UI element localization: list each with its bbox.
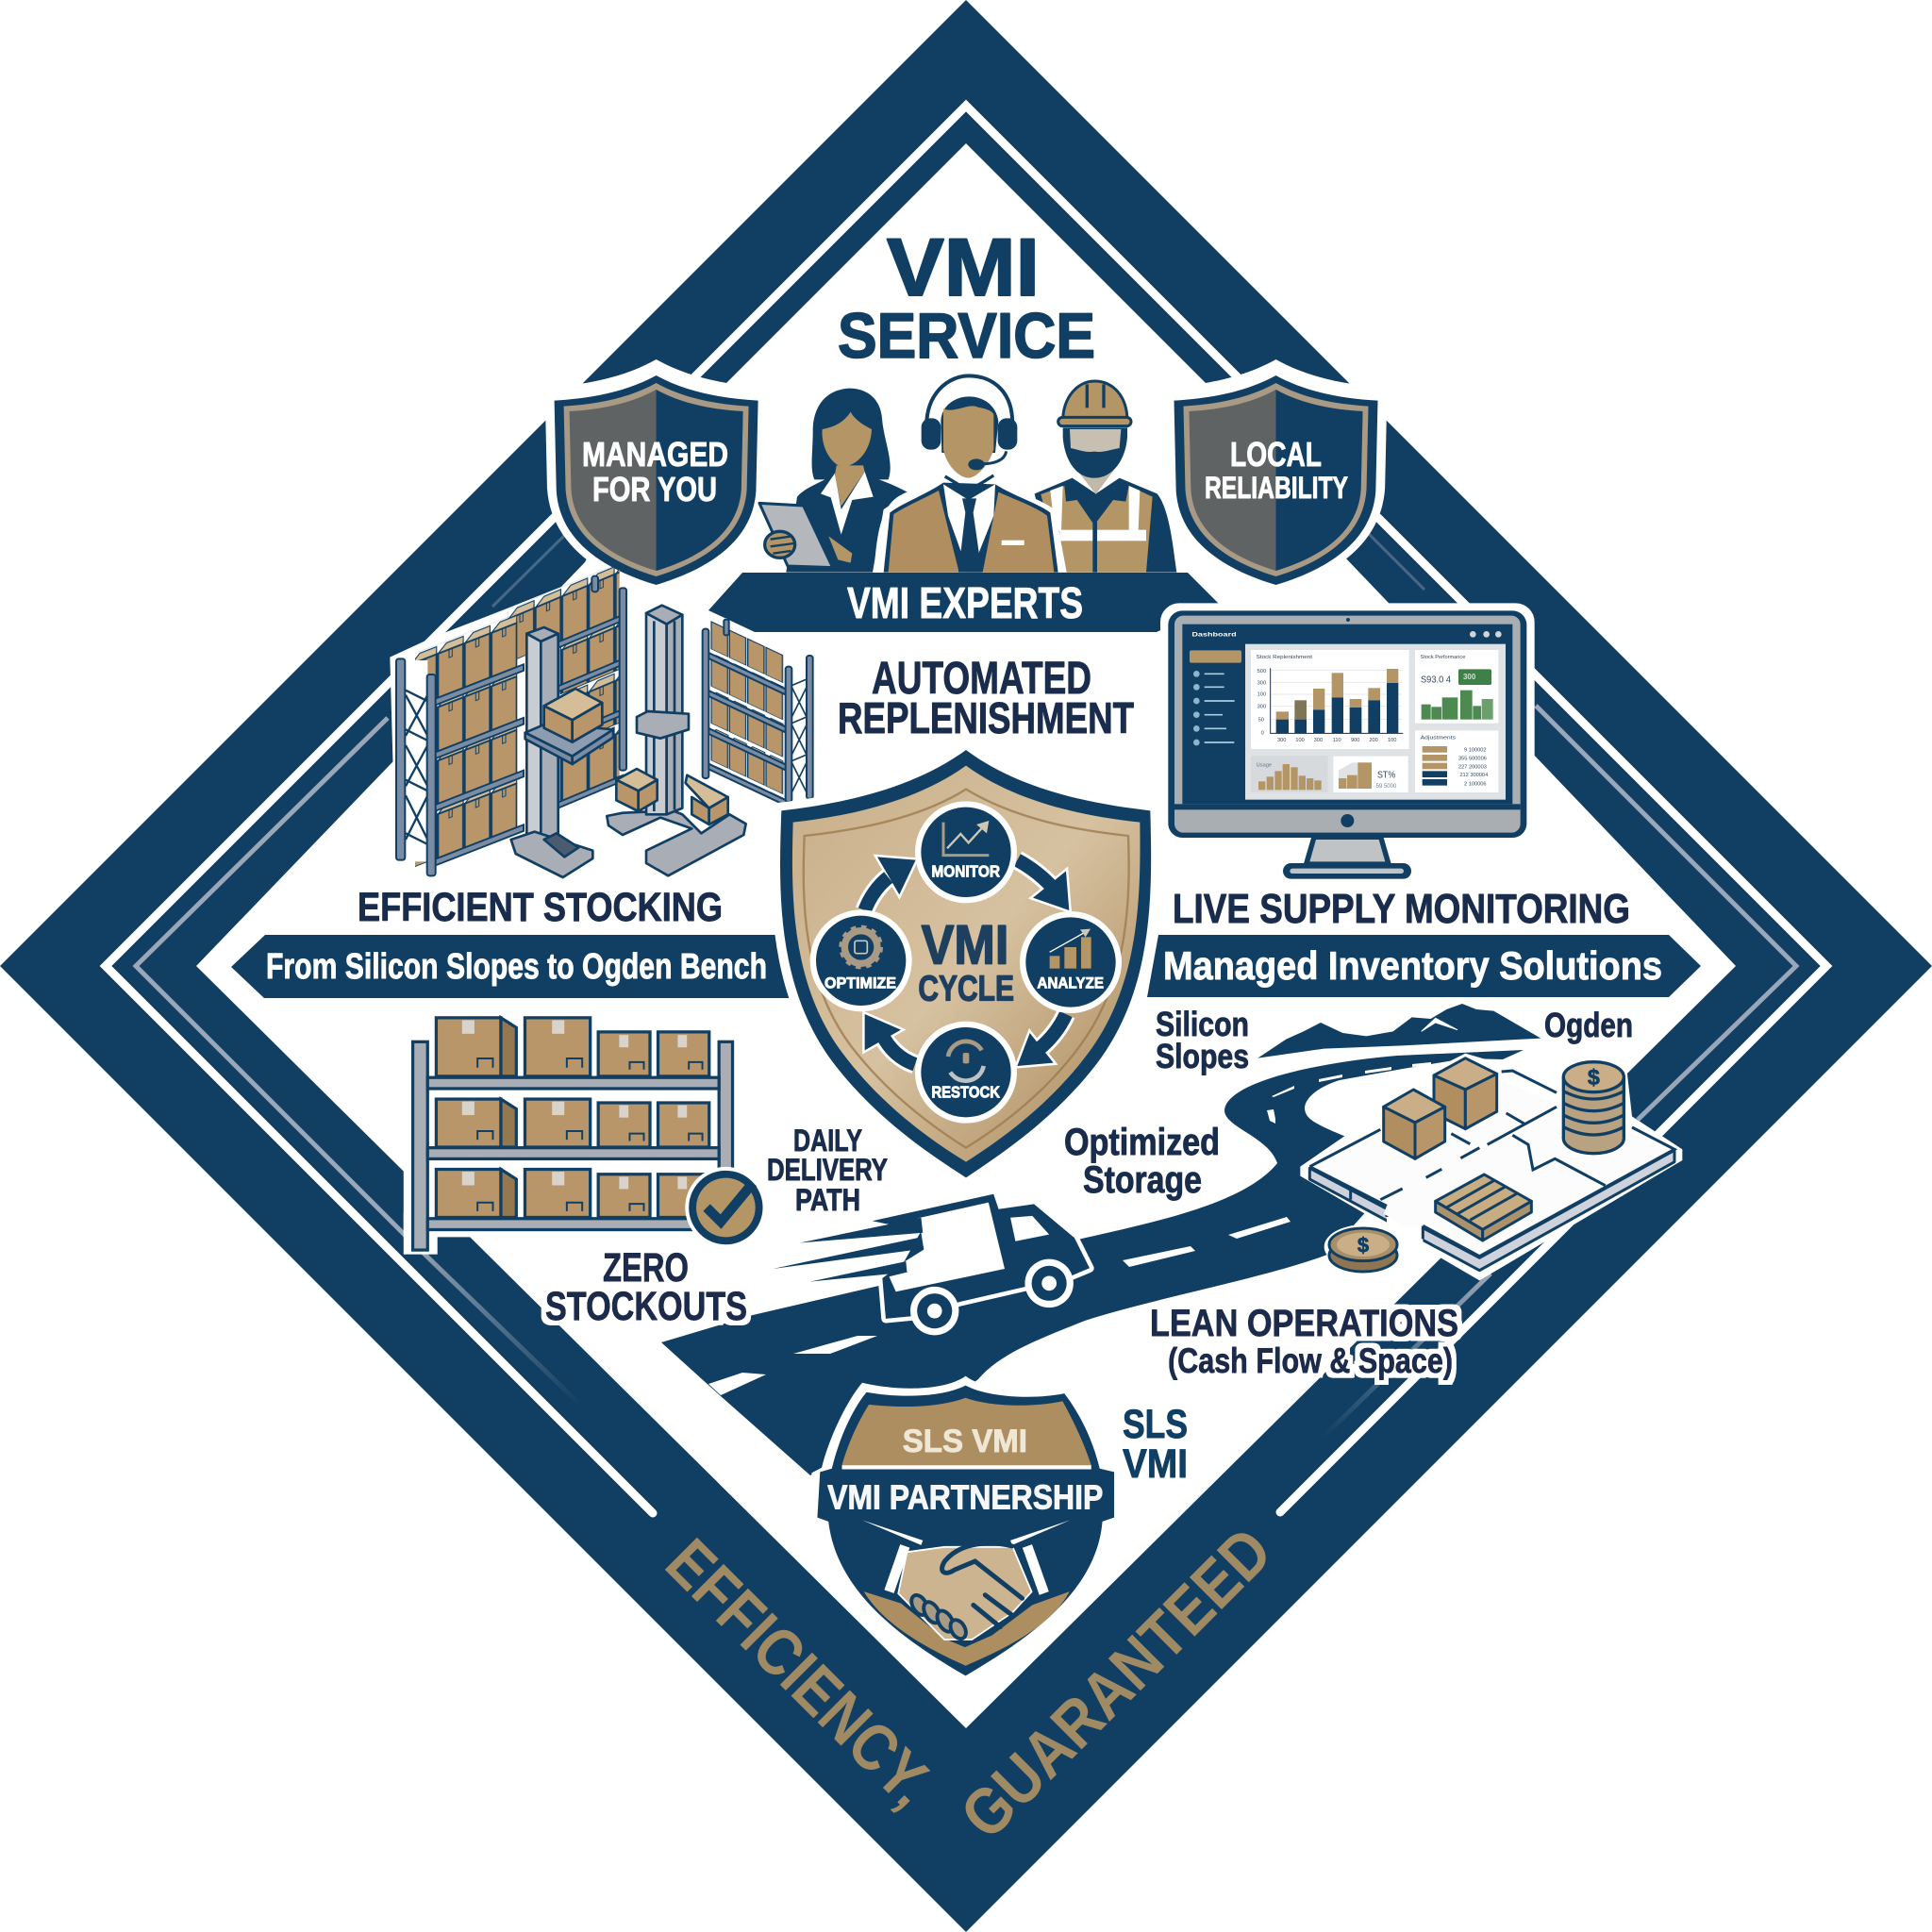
panel: green chart: 300	[1463, 673, 1476, 681]
shield: local reliability: LOCAL	[1230, 435, 1322, 474]
badge: VMI partnership: SLS VMI	[903, 1424, 1027, 1459]
shelf frame	[413, 1041, 733, 1250]
step: monitor: MONITOR	[931, 861, 1000, 880]
bar chart: main: 0	[1261, 730, 1264, 736]
label: SLS VMI	[1123, 1402, 1188, 1487]
label: daily delivery path: DELIVERY	[767, 1153, 888, 1187]
heading: live supply monitoring: LIVE SUPPLY MONITORING	[1173, 886, 1630, 932]
label: daily delivery path: DAILY	[793, 1124, 862, 1158]
panel: green chart	[1415, 650, 1498, 724]
rack: rear section	[508, 561, 623, 829]
boxes	[436, 1018, 709, 1217]
label: VMI cycle: CYCLE	[918, 969, 1014, 1008]
panel: small stat chart	[1333, 757, 1408, 792]
panel: small stat chart: 59 5000	[1376, 784, 1397, 790]
person: woman with tablet	[759, 389, 908, 573]
icon: pallet	[1436, 1174, 1531, 1241]
bar chart: main	[1251, 650, 1409, 749]
label: optimized storage: Storage	[1083, 1159, 1202, 1201]
label: SLS VMI: SLS	[1123, 1402, 1188, 1447]
bar chart: main: 500	[1257, 669, 1266, 675]
icon: check badge	[685, 1167, 766, 1248]
icon: coin: $	[1357, 1233, 1369, 1257]
icon: coin stack	[1563, 1062, 1624, 1154]
shelf: zero stockouts illustration	[404, 1012, 766, 1255]
bar chart: main: 100	[1295, 738, 1305, 743]
banner: from Silicon Slopes to Ogden Bench: From Silicon Slopes to Ogden Bench	[266, 947, 767, 987]
label: zero stockouts: ZERO	[603, 1245, 689, 1291]
panel: data table: Adjustments	[1421, 736, 1456, 741]
arrow: monitor to analyze	[1017, 860, 1069, 910]
step: restock: RESTOCK	[931, 1082, 1000, 1101]
label: Silicon Slopes: Slopes	[1156, 1037, 1249, 1075]
label: VMI cycle	[918, 915, 1014, 1008]
shield: local reliability: RELIABILITY	[1205, 471, 1348, 505]
rack: right section	[710, 621, 784, 804]
heading: efficient stocking: EFFICIENT STOCKING	[358, 885, 723, 930]
step: restock	[915, 1022, 1017, 1124]
monitor: live dashboard: Dashboard	[1191, 632, 1237, 639]
label: Silicon Slopes: Silicon	[1156, 1005, 1249, 1043]
central shield: VMI cycle	[771, 739, 1160, 1191]
panel: small tan histogram: Usage	[1257, 763, 1272, 769]
label: optimized storage	[1064, 1122, 1220, 1201]
label: zero stockouts: STOCKOUTS	[545, 1284, 747, 1329]
shield: managed for you	[545, 359, 768, 593]
banner: managed inventory solutions	[1147, 935, 1701, 997]
person: man with headset	[873, 375, 1067, 573]
icon: delivery truck	[773, 1194, 1090, 1335]
label: lean operations: (Cash Flow & Space)	[1168, 1341, 1453, 1380]
banner: from Silicon Slopes to Ogden Bench	[231, 935, 791, 998]
step: analyze	[1020, 911, 1122, 1013]
label: optimized storage: Optimized	[1064, 1122, 1220, 1163]
panel: data table: 9 100002	[1464, 748, 1487, 754]
arrow: optimize to monitor	[865, 857, 916, 910]
shield: managed for you: MANAGED	[582, 435, 728, 474]
bar chart: main: Stock Replenishment	[1257, 655, 1312, 660]
person: worker with helmet	[1035, 381, 1176, 573]
bar chart: main: 900	[1351, 738, 1359, 743]
label: lean operations: LEAN OPERATIONS	[1150, 1303, 1458, 1344]
bar chart: main: 200	[1369, 738, 1378, 743]
arrow: restock to optimize	[865, 1014, 915, 1064]
heading: automated replenishment	[838, 654, 1134, 742]
badge: VMI partnership	[811, 1376, 1120, 1681]
bar chart: main: 300	[1257, 704, 1266, 709]
title: SERVICE	[838, 300, 1095, 372]
bar chart: main: 100	[1257, 692, 1266, 698]
banner: VMI experts: VMI EXPERTS	[847, 578, 1083, 627]
label: daily delivery path: PATH	[795, 1183, 860, 1217]
panel: data table: 355 500006	[1458, 757, 1487, 762]
heading: automated replenishment: REPLENISHMENT	[838, 693, 1134, 742]
banner: managed inventory solutions: Managed Inventory Solutions	[1163, 943, 1662, 988]
step: optimize	[810, 909, 912, 1011]
label: VMI cycle: VMI	[922, 915, 1008, 976]
panel: data table: 2 100006	[1464, 781, 1487, 787]
icon: coin	[1324, 1224, 1402, 1272]
mountains	[1257, 1004, 1541, 1058]
illustration: warehouse racks and lifts	[390, 561, 814, 880]
label: zero stockouts	[545, 1245, 747, 1329]
icon: boxes on platform	[1384, 1058, 1497, 1158]
label: SLS VMI: VMI	[1123, 1441, 1188, 1487]
bar chart: main: 110	[1333, 738, 1341, 743]
panel: small tan histogram	[1251, 756, 1328, 792]
panel: green chart: Stock Performance	[1421, 655, 1465, 660]
tagline: guaranteed: GUARANTEED	[946, 1513, 1286, 1853]
shield: managed for you: FOR YOU	[592, 470, 717, 508]
shield: local reliability	[1164, 359, 1387, 593]
icon: handshake	[862, 1520, 1070, 1666]
panel: small stat chart: ST%	[1377, 771, 1395, 781]
lift: right column	[607, 606, 746, 875]
title: VMI	[887, 223, 1040, 313]
panel: data table: 212 300004	[1459, 773, 1488, 778]
banner: VMI experts	[708, 573, 1219, 632]
bar chart: main: 300	[1277, 738, 1286, 743]
icon: coin stack: $	[1588, 1065, 1600, 1090]
label: lean operations	[1150, 1303, 1458, 1380]
sidebar menu	[1190, 650, 1241, 745]
step: analyze: ANALYZE	[1037, 974, 1104, 992]
monitor: live dashboard	[1160, 603, 1535, 884]
label: Ogden: Ogden	[1544, 1006, 1633, 1044]
icon: VMI experts group	[759, 375, 1176, 573]
heading: automated replenishment: AUTOMATED	[872, 654, 1091, 704]
bar chart: main: 300	[1257, 680, 1266, 686]
road lane markings	[708, 1062, 1431, 1395]
arrow: analyze to restock	[1017, 1014, 1066, 1066]
rack: front section	[415, 611, 524, 874]
step: optimize: OPTIMIZE	[824, 974, 896, 992]
step: monitor	[915, 801, 1017, 903]
bar chart: main: 50	[1258, 718, 1264, 724]
label: Silicon Slopes	[1156, 1005, 1249, 1075]
panel: data table: 227 200003	[1458, 764, 1487, 770]
label: daily delivery path	[767, 1124, 888, 1217]
title	[838, 223, 1095, 372]
isometric site platform	[1300, 1054, 1682, 1280]
panel: data table	[1415, 730, 1498, 792]
panel: green chart: S93.0 4	[1421, 675, 1451, 685]
bar chart: main: 100	[1388, 738, 1396, 743]
lift: left column	[511, 627, 613, 877]
road	[661, 1050, 1524, 1475]
bar chart: main: 300	[1314, 738, 1323, 743]
badge: VMI partnership: VMI PARTNERSHIP	[827, 1479, 1103, 1517]
tagline: efficiency: EFFICIENCY,	[652, 1524, 948, 1821]
